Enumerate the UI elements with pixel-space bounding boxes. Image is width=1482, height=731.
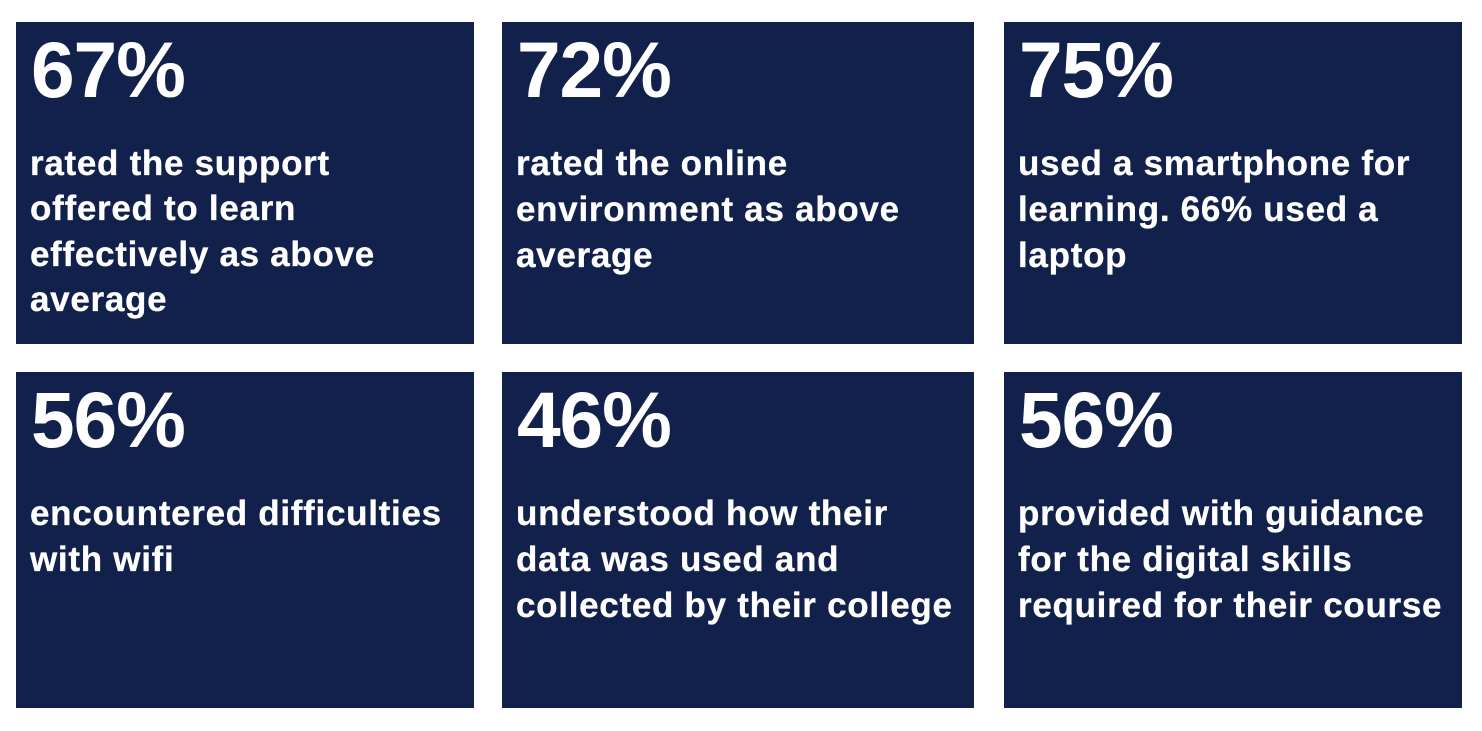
text: smartphone description: learning. 66% used a — [1018, 190, 1378, 229]
text: data description: collected by their college — [516, 586, 953, 625]
text: digital skills description: provided with guidance — [1018, 494, 1424, 533]
statistic: 67%: 67% — [31, 26, 185, 114]
text: data description — [516, 494, 953, 625]
panel: 75% smartphone — [1004, 22, 1462, 344]
statistic: 56%: 56% — [31, 376, 185, 464]
text: support description: effectively as above — [30, 235, 375, 274]
text: support description — [30, 144, 375, 319]
text: data description: data was used and — [516, 540, 839, 579]
panel: 67% support — [16, 22, 474, 344]
text: wifi description: encountered difficulties — [30, 494, 442, 533]
text: support description: offered to learn — [30, 189, 296, 228]
text: online environment description: rated the online — [516, 144, 788, 183]
statistic: 72%: 72% — [517, 26, 671, 114]
text: digital skills description: for the digital skills — [1018, 540, 1353, 579]
text: data description: understood how their — [516, 494, 888, 533]
statistic: 75%: 75% — [1019, 26, 1173, 114]
text: smartphone description: laptop — [1018, 236, 1127, 275]
text: digital skills description — [1018, 494, 1442, 625]
text: online environment description — [516, 144, 900, 275]
panel: 56% wifi — [16, 372, 474, 708]
text: digital skills description: required for their course — [1018, 586, 1442, 625]
statistic: 56%: 56% — [1019, 376, 1173, 464]
text: support description: rated the support — [30, 144, 330, 183]
text: support description: average — [30, 280, 167, 319]
panel: 56% digital skills — [1004, 372, 1462, 708]
text: smartphone description — [1018, 144, 1410, 275]
panel: 46% data — [502, 372, 974, 708]
statistic: 46%: 46% — [517, 376, 671, 464]
text: online environment description: average — [516, 236, 653, 275]
text: wifi description: with wifi — [30, 540, 174, 579]
panel: 72% online environment — [502, 22, 974, 344]
text: smartphone description: used a smartphone for — [1018, 144, 1410, 183]
text: wifi description — [30, 494, 442, 579]
text: online environment description: environment as above — [516, 190, 900, 229]
